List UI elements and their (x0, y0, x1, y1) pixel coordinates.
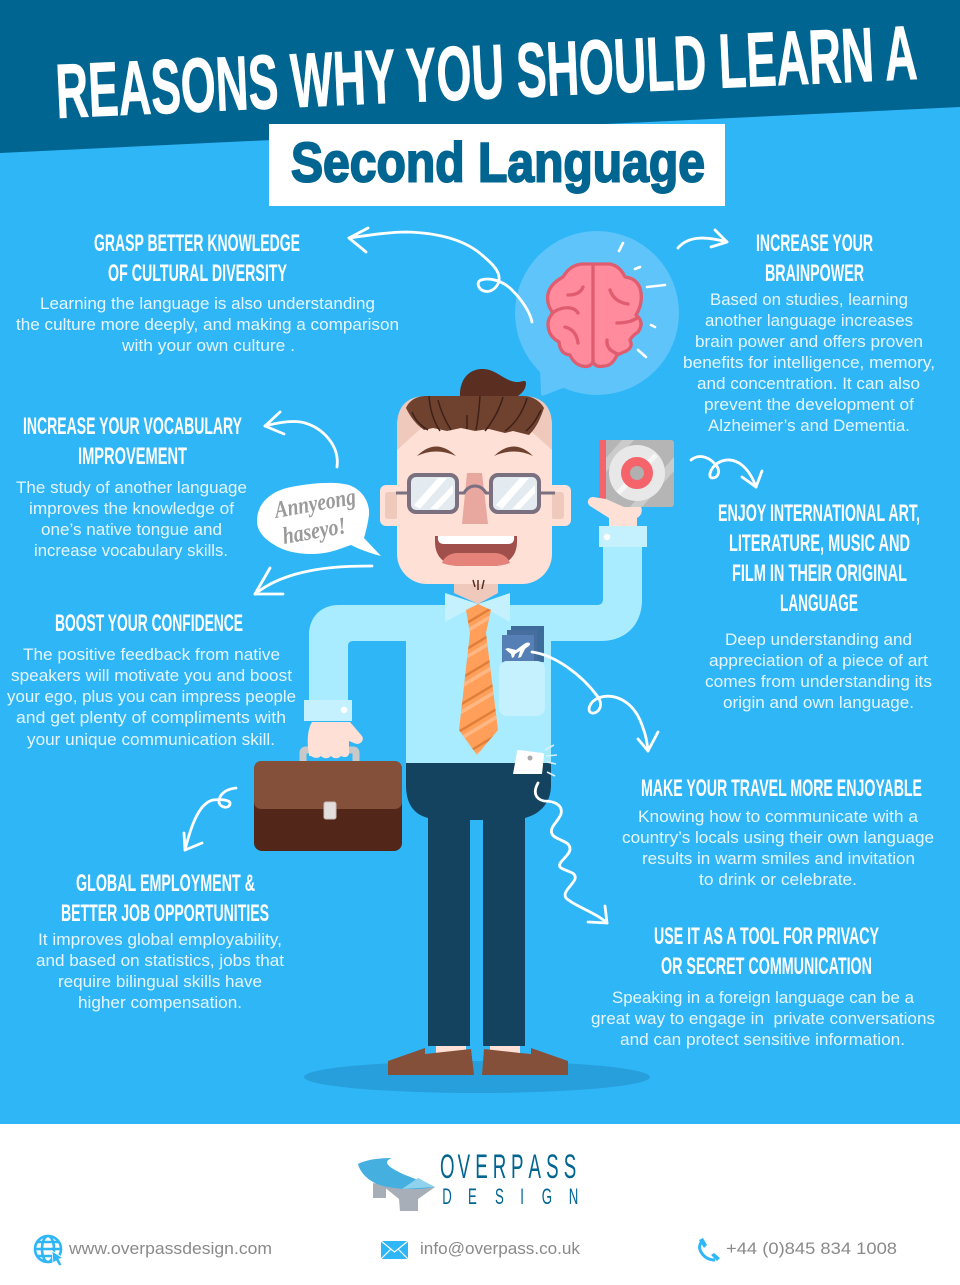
heading: IMPROVEMENT (78, 443, 187, 470)
panel: privacy (591, 923, 935, 1049)
arrow: travel (532, 652, 658, 751)
heading (23, 413, 242, 470)
heading: GRASP BETTER KNOWLEDGE (94, 230, 300, 257)
panel: vocabulary (16, 413, 247, 560)
heading: BOOST YOUR CONFIDENCE (55, 610, 243, 637)
quiff (460, 369, 526, 398)
panel: brainpower (683, 230, 935, 435)
shadow (304, 1061, 650, 1093)
arrow: vocabulary (265, 412, 337, 467)
hair strands (412, 396, 541, 431)
hair (406, 396, 544, 435)
text block (622, 807, 934, 889)
text block (16, 478, 247, 560)
header band (0, 0, 960, 153)
heading: BETTER JOB OPPORTUNITIES (61, 900, 269, 927)
contact: phone (699, 1238, 897, 1261)
panel: employment (36, 870, 284, 1012)
shoes (388, 1048, 568, 1075)
text block: the culture more deeply, and making a comparison (16, 315, 399, 334)
heading: INCREASE YOUR (756, 230, 873, 257)
icon: phone (699, 1238, 720, 1261)
text block: your unique communication skill. (27, 730, 275, 749)
panel: cultural diversity (16, 230, 399, 355)
text block: your ego, plus you can impress people (7, 687, 296, 706)
text block: require bilingual skills have (58, 972, 262, 991)
icon: globe (35, 1236, 63, 1266)
contact: email: info@overpass.co.uk (420, 1239, 580, 1258)
text block: country’s locals using their own language (622, 828, 934, 847)
logo subtext: DESIGN (442, 1185, 578, 1209)
mouth (435, 536, 517, 566)
text block (36, 930, 284, 1012)
cuff: left (304, 700, 352, 721)
shirt (309, 546, 642, 763)
logo text: OVERPASS (440, 1147, 576, 1185)
icon: thought bubble with brain (515, 231, 679, 396)
glasses (396, 475, 555, 512)
socks (436, 1046, 520, 1054)
text block: and get plenty of compliments with (16, 708, 286, 727)
heading: GLOBAL EMPLOYMENT & (76, 870, 255, 897)
speech bubble: Annyeong haseyo (257, 483, 381, 556)
eyebrows (417, 446, 533, 456)
contact: phone: +44 (0)845 834 1008 (726, 1239, 897, 1258)
text block: Speaking in a foreign language can be a (612, 988, 915, 1007)
arrow: employment (184, 788, 236, 850)
character (254, 369, 674, 1093)
text block: one’s native tongue and (41, 520, 222, 539)
logo mark (358, 1158, 435, 1211)
text block: The study of another language (16, 478, 247, 497)
subtitle box (269, 124, 725, 206)
forehead shade (397, 396, 552, 450)
text block: improves the knowledge of (29, 499, 234, 518)
text block: with your own culture . (121, 336, 295, 355)
text block: Alzheimer’s and Dementia. (708, 416, 910, 435)
briefcase (254, 761, 402, 851)
text block (683, 290, 935, 435)
arrow: art (691, 457, 762, 487)
neck (454, 584, 498, 604)
speech bubble: Annyeong haseyo: haseyo! (281, 513, 348, 550)
icon: envelope (381, 1241, 408, 1259)
panel: art and literature (705, 500, 932, 712)
heading: OF CULTURAL DIVERSITY (108, 260, 287, 287)
heading: BRAINPOWER (765, 260, 864, 287)
arrow: brainpower (678, 230, 727, 248)
text block: brain power and offers proven (695, 332, 923, 351)
cuff: right (599, 526, 647, 547)
stubble (473, 580, 484, 590)
heading: LANGUAGE (780, 590, 858, 617)
boarding pass (502, 626, 544, 665)
panel: confidence (7, 610, 296, 749)
text block: Based on studies, learning (710, 290, 908, 309)
contact: website: www.overpassdesign.com (68, 1239, 272, 1258)
briefcase handle (303, 750, 356, 762)
contact: website (35, 1236, 272, 1266)
text block (16, 294, 399, 355)
text block: to drink or celebrate. (699, 870, 857, 889)
text block: great way to engage in private conversations (591, 1009, 935, 1028)
pocket (499, 661, 545, 716)
text block (591, 988, 935, 1049)
head (397, 396, 552, 584)
heading (94, 230, 300, 287)
text block: appreciation of a piece of art (709, 651, 928, 670)
text block: benefits for intelligence, memory, (683, 353, 935, 372)
hand: right (588, 497, 642, 526)
ears (380, 485, 571, 526)
arrow: privacy (535, 783, 607, 923)
heading (756, 230, 873, 287)
arrow: culture (349, 228, 532, 322)
text block: Knowing how to communicate with a (638, 807, 919, 826)
nose (462, 473, 488, 524)
text block: and concentration. It can also (697, 374, 920, 393)
text block: another language increases (705, 311, 913, 330)
idea rays (619, 243, 665, 357)
panel: travel (622, 775, 934, 889)
text block: It improves global employability, (38, 930, 282, 949)
brain (548, 264, 641, 366)
heading (61, 870, 269, 927)
arrow: to confidence (255, 566, 372, 594)
text block (705, 630, 932, 712)
text block: increase vocabulary skills. (34, 541, 228, 560)
heading: INCREASE YOUR VOCABULARY (23, 413, 242, 440)
text block: and based on statistics, jobs that (36, 951, 284, 970)
subtitle box: Second Language (291, 130, 705, 194)
collar (445, 593, 510, 622)
text block: speakers will motivate you and boost (11, 666, 292, 685)
heading (654, 923, 879, 980)
heading (718, 500, 920, 617)
text block: comes from understanding its (705, 672, 932, 691)
text block: results in warm smiles and invitation (642, 849, 915, 868)
logo (358, 1147, 578, 1211)
text block: The positive feedback from native (23, 645, 280, 664)
hand: left (308, 722, 363, 758)
pager (513, 745, 557, 776)
speech bubble: Annyeong haseyo: Annyeong (271, 484, 358, 524)
cd album (599, 440, 674, 507)
text block: prevent the development of (704, 395, 914, 414)
tie (459, 604, 498, 755)
text block (7, 645, 296, 749)
text block: and can protect sensitive information. (620, 1030, 905, 1049)
text block: Deep understanding and (725, 630, 912, 649)
footer (0, 1124, 960, 1285)
text block: higher compensation. (78, 993, 242, 1012)
text block: origin and own language. (723, 693, 914, 712)
trousers (406, 763, 551, 1046)
text block: Learning the language is also understanding (40, 294, 375, 313)
